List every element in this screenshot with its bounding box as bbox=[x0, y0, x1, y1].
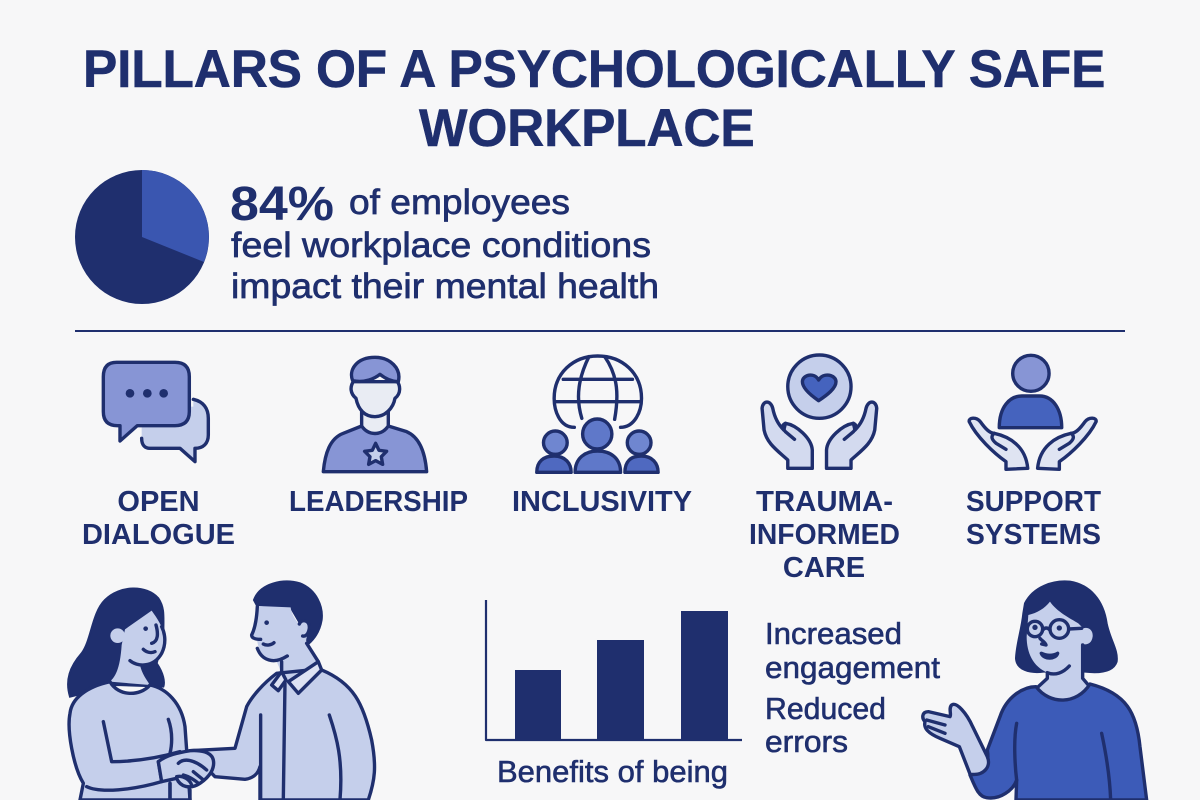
sweater bbox=[970, 684, 1147, 800]
label: trauma-informed care: INFORMED bbox=[749, 519, 900, 551]
label: support systems: SUPPORT bbox=[966, 486, 1101, 518]
statistic text: 84% bbox=[230, 178, 334, 231]
icon: globe and people bbox=[537, 356, 658, 472]
benefits list: errors bbox=[765, 724, 848, 759]
label: support systems: SYSTEMS bbox=[966, 519, 1101, 551]
label: trauma-informed care: CARE bbox=[783, 552, 865, 584]
statistic text: feel workplace conditions bbox=[231, 226, 651, 265]
label: open dialogue: OPEN bbox=[117, 486, 200, 518]
clasped hands bbox=[158, 751, 214, 800]
chart caption: Benefits of being bbox=[497, 754, 728, 789]
pillar: leadership bbox=[289, 357, 468, 518]
hair bbox=[1016, 581, 1117, 672]
label: open dialogue: DIALOGUE bbox=[82, 519, 235, 551]
statistic text: of employees bbox=[349, 183, 570, 222]
title bbox=[83, 40, 1105, 158]
label: leadership: LEADERSHIP bbox=[289, 486, 468, 518]
man bbox=[190, 581, 375, 800]
label: open dialogue bbox=[82, 486, 235, 551]
hand bbox=[923, 704, 988, 774]
benefits list bbox=[765, 616, 940, 759]
icon: speech bubbles bbox=[103, 362, 208, 462]
bar chart: benefits bbox=[486, 600, 742, 789]
label: trauma-informed care bbox=[749, 486, 900, 584]
pillar: support systems bbox=[966, 355, 1101, 551]
pie chart: 84% statistic bbox=[75, 170, 209, 304]
benefits list: Reduced bbox=[765, 691, 886, 726]
pillar: inclusivity bbox=[512, 356, 692, 518]
pillar: open dialogue bbox=[82, 362, 235, 551]
illustration: handshake between two colleagues bbox=[68, 581, 375, 800]
illustration: woman with glasses gesturing bbox=[923, 581, 1147, 800]
icon: hands holding heart bbox=[762, 355, 877, 468]
woman bbox=[68, 589, 190, 800]
pillar: trauma-informed care bbox=[749, 355, 900, 584]
benefits list: engagement bbox=[765, 650, 940, 685]
title: PILLARS OF A PSYCHOLOGICALLY SAFE bbox=[83, 40, 1105, 99]
face bbox=[1027, 602, 1093, 701]
label: inclusivity: INCLUSIVITY bbox=[512, 486, 692, 518]
label: trauma-informed care: TRAUMA- bbox=[756, 486, 893, 518]
icon: hands supporting person bbox=[969, 355, 1096, 469]
label: support systems bbox=[966, 486, 1101, 551]
statistic text bbox=[230, 178, 659, 306]
benefits list: Increased bbox=[765, 616, 902, 651]
icon: leader with star bbox=[323, 357, 427, 472]
title: WORKPLACE bbox=[419, 99, 755, 158]
statistic text: impact their mental health bbox=[231, 267, 659, 306]
